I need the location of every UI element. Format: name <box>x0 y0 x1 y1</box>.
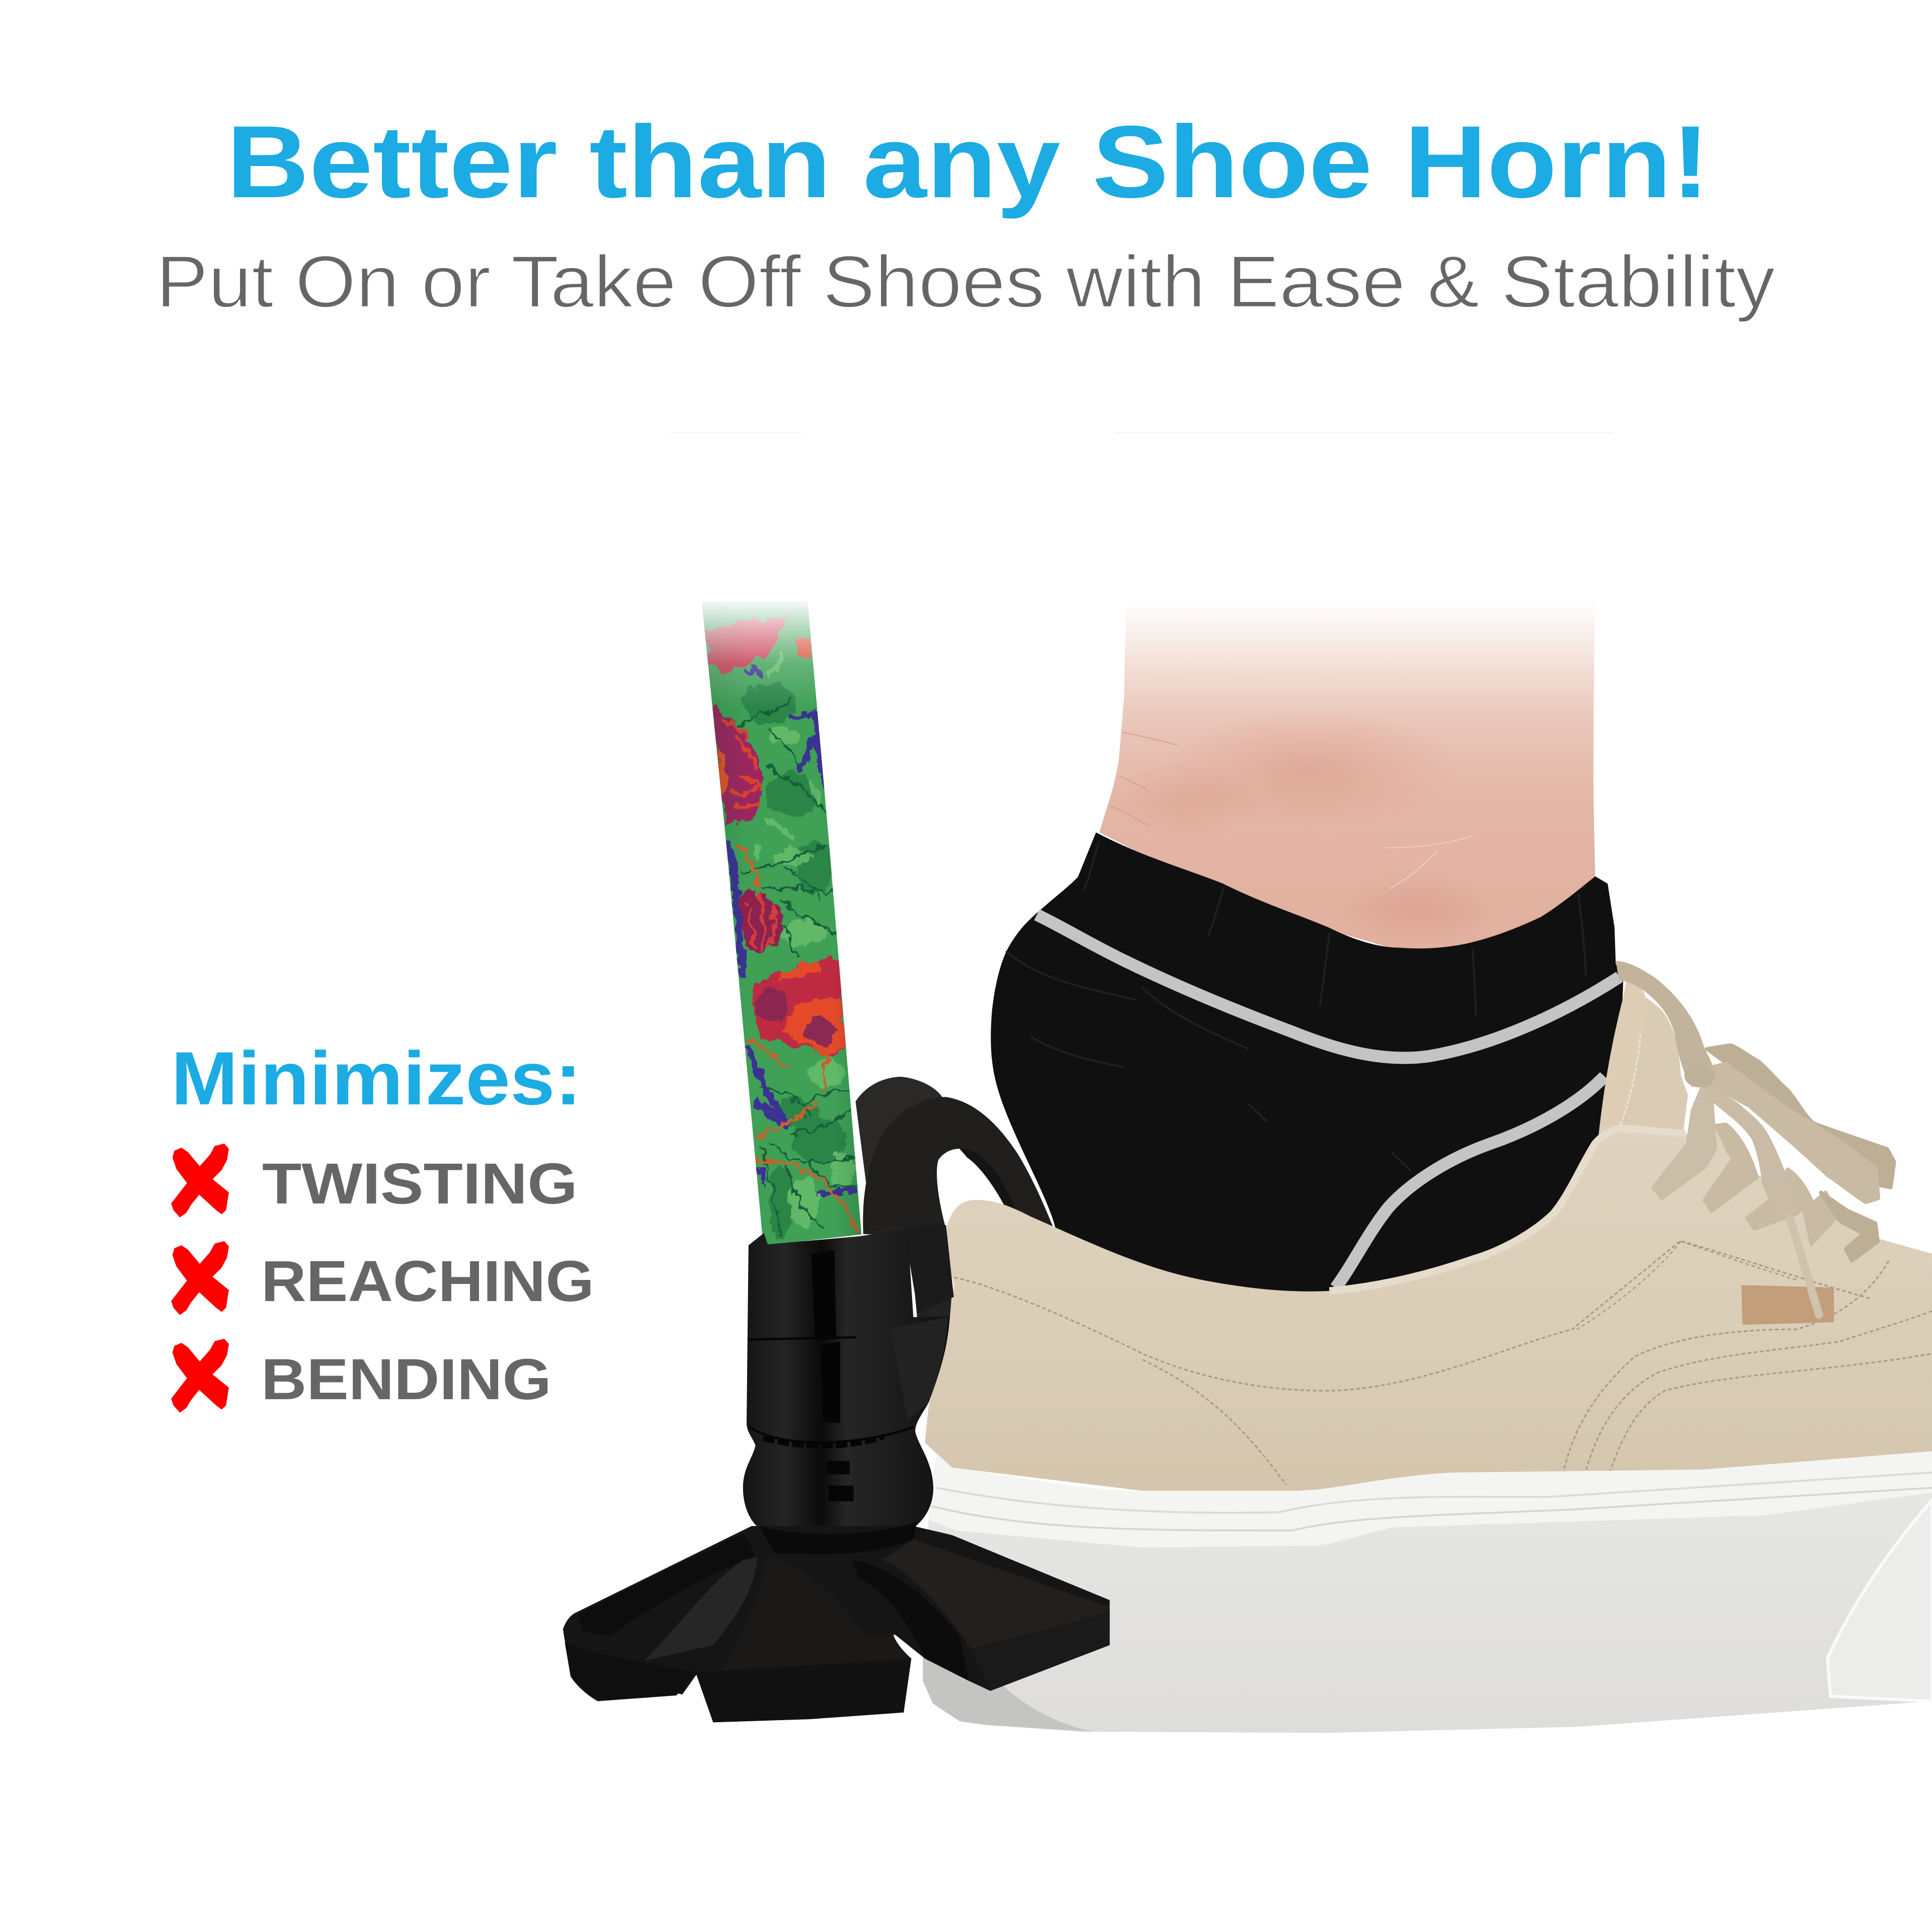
tripod foot <box>563 1526 1110 1722</box>
heading: Minimizes: Minimizes: <box>171 1036 582 1120</box>
sock stripes <box>1037 915 1620 1058</box>
gap between foot prongs <box>894 1635 911 1658</box>
leg <box>1099 599 1595 950</box>
outsole toe panel <box>1827 1500 1932 1701</box>
shoe tongue <box>1598 963 1712 1144</box>
sock <box>991 833 1623 1317</box>
hook back loop <box>856 1077 1056 1236</box>
shoe stitching <box>954 1241 1932 1485</box>
title: Better than any Shoe Horn! <box>226 105 1710 219</box>
icon: red x bending <box>172 1339 228 1412</box>
panel: minimizes list <box>171 1036 594 1412</box>
lace tail <box>1702 1082 1797 1216</box>
label: reaching: REACHING <box>261 1249 594 1314</box>
cane shaft <box>696 597 869 1252</box>
outsole wall <box>923 1493 1932 1733</box>
icon: red x reaching <box>172 1242 228 1315</box>
holder clip <box>863 1227 952 1318</box>
illustration: cane tip and shoe <box>563 597 1932 1733</box>
shoe collar binding <box>1329 1128 1685 1291</box>
lace knot <box>1684 1064 1715 1087</box>
lace bow front band <box>1707 1064 1878 1201</box>
shoe laces and label <box>1574 1045 1894 1331</box>
shoe <box>923 963 1932 1733</box>
shoe label <box>1741 1285 1834 1325</box>
lower lace crossings <box>1705 1124 1878 1261</box>
subtitle: Put On or Take Off Shoes with Ease & Stability <box>156 240 1775 323</box>
shoe upper <box>923 1125 1932 1733</box>
lace bow back band <box>1707 1045 1894 1187</box>
label: twisting: TWISTING <box>262 1152 578 1216</box>
label: bending: BENDING <box>261 1347 551 1412</box>
hanging lace <box>1653 1087 1715 1198</box>
cane tip <box>563 1225 1110 1722</box>
floral pattern <box>705 617 859 1235</box>
midsole band <box>923 1441 1932 1548</box>
icon: red x twisting <box>172 1144 228 1217</box>
infographic canvas <box>163 123 1932 1733</box>
ferrule body <box>743 1229 950 1528</box>
